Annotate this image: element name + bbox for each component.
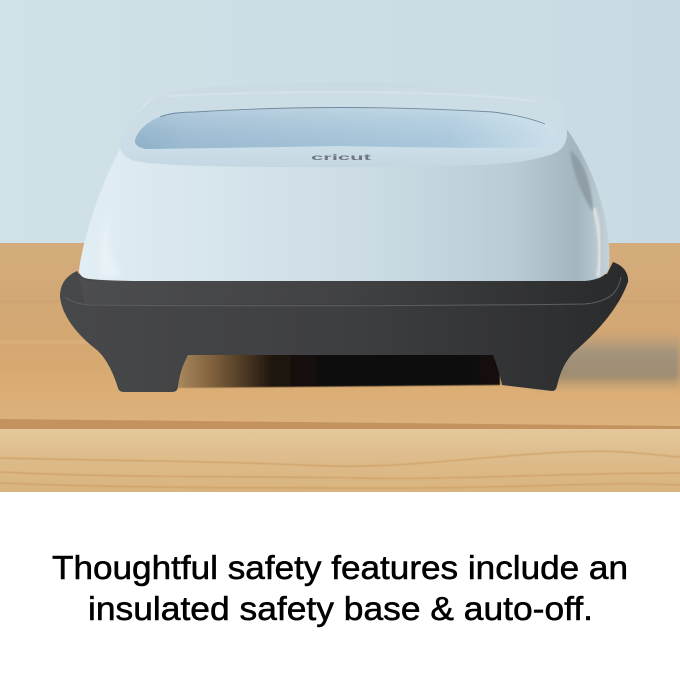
tray inner rim line [65, 277, 621, 306]
caption line 2: insulated safety base & auto-off. [88, 590, 593, 627]
press glossy body [79, 95, 609, 281]
cricut logo: cricut [311, 153, 372, 162]
lid rim [120, 82, 567, 167]
body dark reflection [570, 150, 593, 212]
caption text [52, 549, 628, 627]
safety base tray with feet [60, 262, 628, 392]
white caption panel [0, 492, 680, 680]
press dark lower band [79, 270, 612, 304]
lid opening [135, 108, 555, 149]
lid opening shading [135, 108, 555, 149]
background wall [0, 0, 680, 244]
shadow under the base [175, 352, 500, 388]
product: heat press [60, 82, 628, 392]
body left highlight [99, 206, 122, 276]
body light reflection [594, 208, 600, 277]
wooden table top [0, 243, 680, 430]
lid upper highlight [165, 92, 535, 101]
caption line 1: Thoughtful safety features include an [52, 549, 628, 586]
opening edge line [160, 108, 545, 124]
wooden table front edge [0, 429, 680, 492]
